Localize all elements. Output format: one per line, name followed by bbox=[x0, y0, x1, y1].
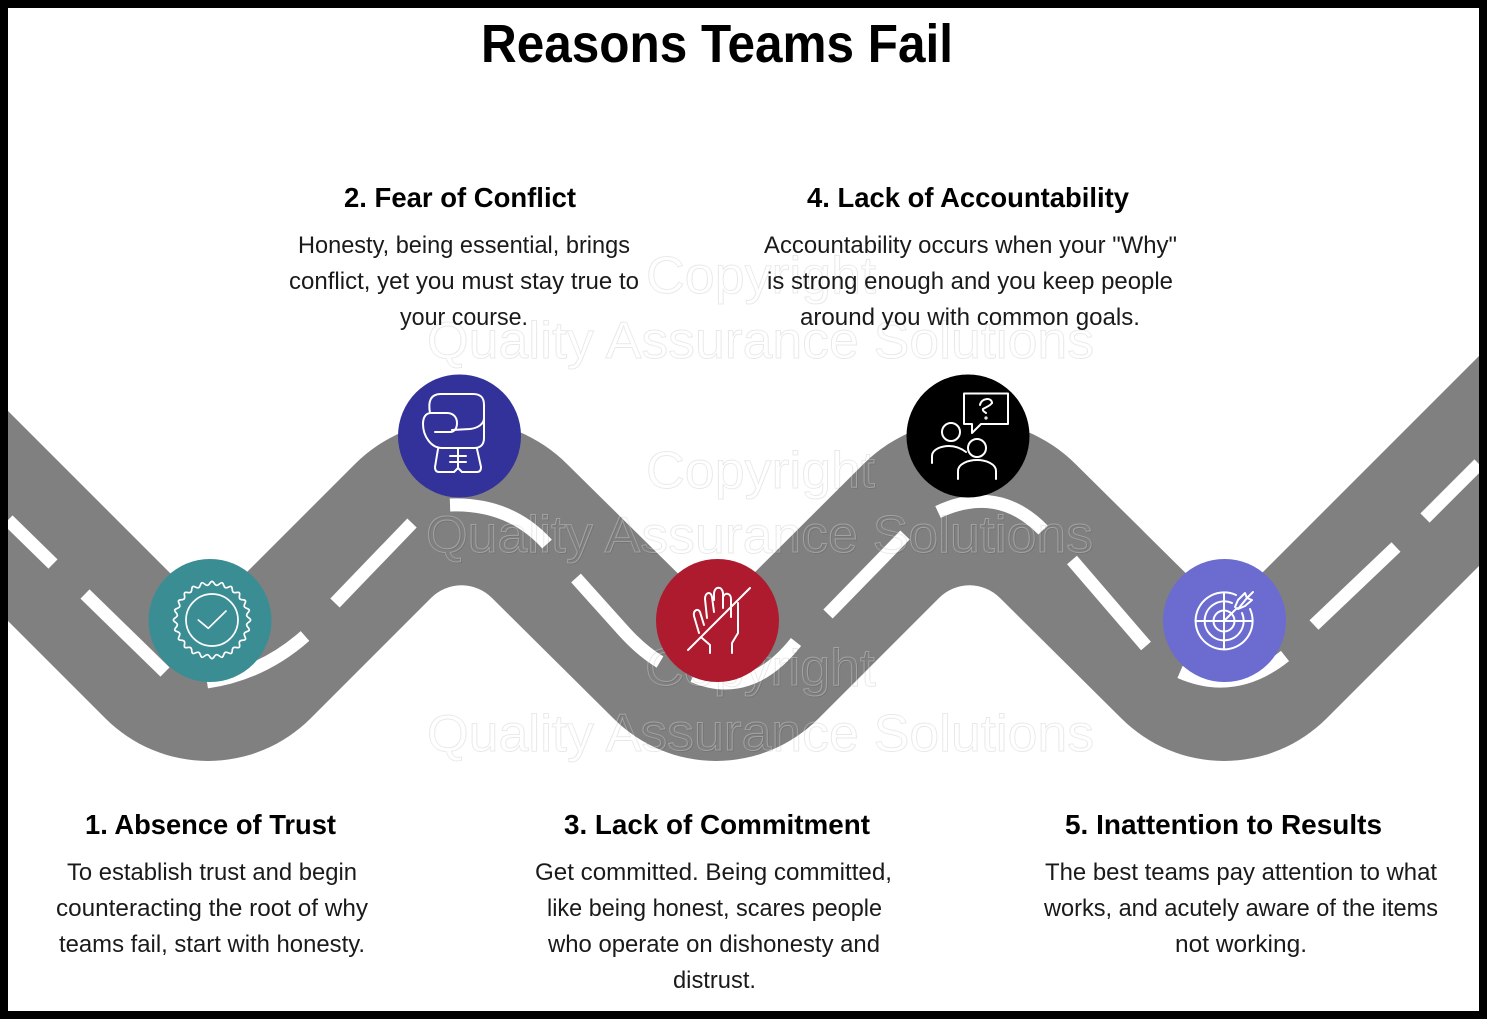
text: Absence of Trust description: counteracting the root of why bbox=[56, 895, 368, 922]
text: Inattention to Results description: not working. bbox=[1175, 931, 1307, 958]
text: Inattention to Results description: The best teams pay attention to what bbox=[1045, 859, 1437, 886]
title: Reasons Teams Fail bbox=[481, 14, 953, 74]
heading: Lack of Commitment: 3. Lack of Commitment bbox=[564, 809, 870, 840]
text: Lack of Commitment description bbox=[535, 859, 892, 994]
text: Lack of Commitment description: distrust. bbox=[673, 967, 756, 994]
watermark: Copyright bbox=[646, 247, 877, 305]
watermark: Copyright bbox=[646, 442, 877, 500]
heading: Absence of Trust: 1. Absence of Trust bbox=[85, 809, 336, 840]
icon: teal badge with check mark bbox=[148, 559, 272, 682]
text: Fear of Conflict description bbox=[289, 232, 639, 331]
heading: Fear of Conflict: 2. Fear of Conflict bbox=[344, 182, 576, 213]
text: Absence of Trust description: teams fail, start with honesty. bbox=[59, 931, 365, 958]
icon: black people with question bubble bbox=[906, 374, 1030, 498]
text: Lack of Commitment description: like being honest, scares people bbox=[547, 895, 882, 922]
text: Lack of Accountability description: around you with common goals. bbox=[800, 304, 1140, 331]
watermark bbox=[426, 246, 1094, 763]
icon: purple target with dart bbox=[1163, 559, 1286, 682]
panel: 2. Fear of Conflict bbox=[289, 182, 639, 331]
watermark: Quality Assurance Solutions bbox=[427, 507, 1094, 565]
text: Inattention to Results description: works, and acutely aware of the items bbox=[1043, 895, 1438, 922]
heading: Inattention to Results: 5. Inattention to Results bbox=[1065, 809, 1382, 840]
text: Lack of Accountability description: is strong enough and you keep people bbox=[767, 268, 1173, 295]
text: Lack of Commitment description: Get committed. Being committed, bbox=[535, 859, 892, 886]
watermark: Quality Assurance Solutions bbox=[426, 311, 1093, 369]
icon: navy boxing glove bbox=[398, 374, 521, 498]
panel: 4. Lack of Accountability bbox=[764, 182, 1177, 331]
text: Lack of Commitment description: who operate on dishonesty and bbox=[547, 931, 880, 958]
heading: Lack of Accountability: 4. Lack of Accountability bbox=[807, 182, 1129, 213]
panel: 5. Inattention to Results bbox=[1043, 809, 1438, 958]
text: Fear of Conflict description: Honesty, being essential, brings bbox=[298, 232, 630, 259]
watermark: Copyright bbox=[645, 441, 876, 499]
panel: 1. Absence of Trust bbox=[56, 809, 368, 958]
watermark: Quality Assurance Solutions bbox=[427, 312, 1094, 370]
text: Fear of Conflict description: your course. bbox=[400, 304, 528, 331]
watermark: Quality Assurance Solutions bbox=[426, 506, 1093, 564]
text: Lack of Accountability description bbox=[764, 232, 1177, 331]
text: Fear of Conflict description: conflict, yet you must stay true to bbox=[289, 268, 639, 295]
watermark: Copyright bbox=[646, 640, 877, 698]
text: Inattention to Results description bbox=[1043, 859, 1438, 958]
icon: red hand with slash bbox=[656, 559, 779, 682]
watermark: Copyright bbox=[645, 639, 876, 697]
text: Lack of Accountability description: Accountability occurs when your "Why" bbox=[764, 232, 1177, 259]
winding road bbox=[8, 356, 1479, 761]
road centre dashes bbox=[8, 464, 1479, 683]
text: Absence of Trust description bbox=[56, 859, 368, 958]
watermark: Copyright bbox=[645, 246, 876, 304]
watermark: Quality Assurance Solutions bbox=[426, 704, 1093, 762]
panel: 3. Lack of Commitment bbox=[535, 809, 892, 994]
watermark: Quality Assurance Solutions bbox=[427, 705, 1094, 763]
text: Absence of Trust description: To establish trust and begin bbox=[67, 859, 357, 886]
